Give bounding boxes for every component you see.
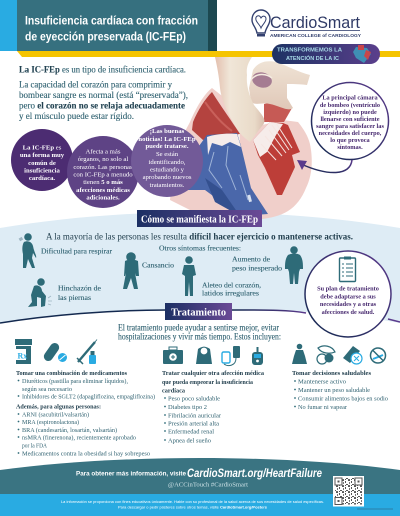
circle: IC-FEp muy común: cardíaca. xyxy=(29,175,55,182)
symptoms lead text: A la mayoría de las personas les resulta difícil hacer ejercicio o mantenerse activas. xyxy=(46,232,353,242)
intro text: pero el corazón no se relaja adecuadamente xyxy=(19,100,185,110)
icon: tired person xyxy=(123,252,139,289)
callout: plan de tratamiento: Su plan de tratamiento xyxy=(317,286,379,292)
pill: Transformemos la atención: ATENCIÓN DE LA IC xyxy=(286,54,339,62)
symptom labels: Dificultad para respirar xyxy=(41,246,112,256)
circle: IC-FEp muy común: La IC-FEp es xyxy=(23,144,62,152)
treatment intro: hospitalizaciones y vivir más tiempo. Estos incluyen: xyxy=(118,332,281,342)
column: otras afecciones: Tratar cualquier otra afección médica xyxy=(162,370,265,377)
heart illustration xyxy=(170,57,312,219)
callout: plan de tratamiento xyxy=(232,251,400,337)
column: otras afecciones: Enfermedad renal xyxy=(168,428,214,435)
column: otras afecciones: Peso poco saludable xyxy=(168,395,220,402)
symptom labels: latidos irregulares xyxy=(202,288,259,298)
footer call to action: Para obtener más información, visite xyxy=(76,470,186,478)
intro text: La IC-FEp es un tipo de insuficiencia cardíaca. xyxy=(19,64,186,74)
heading: Tratamiento xyxy=(165,303,232,320)
circle: afecciones adicionales xyxy=(67,136,139,208)
callout: cámara de bombeo: de bombeo (ventrículo xyxy=(320,102,380,109)
column: medicamentos: nsMRA (finerenona), recientemente aprobado xyxy=(22,434,136,441)
callout: cámara de bombeo: síntomas. xyxy=(337,144,363,151)
column: medicamentos: Además, para algunas personas: xyxy=(16,403,101,410)
circle: IC-FEp muy común: una forma muy xyxy=(20,152,65,159)
heading: Cómo se manifiesta: Cómo se manifiesta la IC-FEp xyxy=(141,214,258,226)
symptom labels xyxy=(41,244,282,302)
footer disclaimer: La información se proporciona con fines educativos únicamente. Hable con su profesional de la salud acerca de sus necesidades de salud específicas. xyxy=(61,500,324,504)
circle: buenas noticias: identificando, xyxy=(149,159,186,166)
column: medicamentos: Inhibidores de SGLT2 (dapagliflozina, empagliflozina) xyxy=(22,393,155,400)
callout: plan de tratamiento: afecciones de salud. xyxy=(322,309,375,316)
symptom labels: Aumento de xyxy=(232,254,271,264)
column: decisiones saludables: Mantener un peso saludable xyxy=(298,387,370,394)
icon: medical case xyxy=(163,347,183,364)
CardioSmart logo: CardioSmart xyxy=(270,13,360,32)
treatment intro: El tratamiento puede ayudar a sentirse mejor, evitar xyxy=(118,322,279,332)
circle: IC-FEp muy común xyxy=(11,129,73,191)
circle: afecciones adicionales: afecciones médicas xyxy=(76,187,130,194)
column: medicamentos: ARNI (sacubitril/valsartán) xyxy=(22,411,89,418)
icon: person with swollen legs xyxy=(28,278,52,307)
callout: cámara de bombeo: izquierdo) no puede xyxy=(323,109,377,116)
footer disclaimer xyxy=(61,500,324,510)
poster code line xyxy=(357,508,393,510)
icon: pill bottle xyxy=(15,339,32,364)
title xyxy=(25,16,198,44)
column: otras afecciones: cardíaca xyxy=(162,387,186,394)
circle: afecciones adicionales: con IC-FEp a menudo xyxy=(73,172,133,178)
symptom labels: Cansancio xyxy=(142,260,174,270)
intro text: bombear sangre es normal (está “preservada”), xyxy=(19,90,188,100)
column: otras afecciones: que pueda empeorar la insuficiencia xyxy=(162,379,254,386)
intro text: La capacidad del corazón para comprimir y xyxy=(19,80,172,90)
circle: afecciones adicionales: adicionales. xyxy=(86,194,120,202)
pill: Transformemos la atención: TRANSFORMEMOS LA xyxy=(277,48,342,54)
symptom labels: peso inesperado xyxy=(232,264,282,272)
column: medicamentos: Diuréticos (pastilla para eliminar líquidos), xyxy=(22,378,128,385)
icon: meditation xyxy=(292,344,307,364)
icon: syringe and vial xyxy=(77,340,97,364)
light blue symptoms band xyxy=(0,212,400,323)
icon: no salt xyxy=(343,346,362,364)
callout: cámara de bombeo: lo que provoca xyxy=(330,137,371,144)
footer call to action: CardioSmart.org/HeartFailure xyxy=(187,468,323,480)
column: medicamentos: Medicamentos contra la obesidad si hay sobrepeso xyxy=(22,450,150,457)
icon: person with weight gain xyxy=(285,246,303,284)
column: medicamentos: por la FDA xyxy=(22,442,47,449)
icon: bathroom scale xyxy=(196,347,212,364)
callout: cámara de bombeo xyxy=(297,82,388,173)
circle: buenas noticias: noticias! La IC-FEp xyxy=(138,136,196,143)
icon: healthy food xyxy=(317,346,335,364)
icon: glucometer xyxy=(252,347,263,365)
column: otras afecciones: Diabetes tipo 2 xyxy=(168,404,207,411)
icon: pill bottle: Rx xyxy=(18,352,27,360)
circle: buenas noticias: puede tratarse. xyxy=(145,143,189,150)
callout: cámara de bombeo: necesidades del cuerpo, xyxy=(319,130,382,137)
circle: afecciones adicionales: órganos, no solo al xyxy=(78,156,128,163)
callout: plan de tratamiento: debe adaptarse a sus xyxy=(320,294,376,300)
QR code xyxy=(333,476,364,506)
callout: cámara de bombeo: sangre para satisfacer las xyxy=(316,123,384,130)
circle: IC-FEp muy común: común de xyxy=(28,160,56,167)
heading: Tratamiento: Tratamiento xyxy=(171,308,226,318)
callout: cámara de bombeo: llenarse con suficiente xyxy=(320,116,380,123)
title: Insuficiencia cardíaca con fracción xyxy=(25,16,198,28)
footer call to action: @ACCinTouch #CardioSmart xyxy=(168,482,248,488)
circle: buenas noticias: estudiando y xyxy=(150,166,185,174)
column: medicamentos: MRA (espironolactona) xyxy=(22,419,79,426)
circle: buenas noticias: tratamientos. xyxy=(150,182,185,189)
column: otras afecciones: Apnea del sueño xyxy=(168,437,211,444)
intro text xyxy=(19,64,188,121)
circle: buenas noticias xyxy=(131,125,203,197)
column: medicamentos xyxy=(16,370,155,457)
icon: blood pressure monitor xyxy=(222,346,240,366)
column: medicamentos: según sea necesario xyxy=(22,386,72,393)
circle: afecciones adicionales: tienen 5 o más xyxy=(83,179,123,186)
treatment intro xyxy=(118,322,281,342)
callout: cámara de bombeo: La principal cámara xyxy=(322,94,378,102)
symptom labels: Hinchazón de xyxy=(58,284,102,292)
navy divider xyxy=(0,310,166,323)
CardioSmart logo: AMERICAN COLLEGE of CARDIOLOGY xyxy=(270,33,361,38)
icon: no smoking xyxy=(370,348,386,363)
symptom labels: Otros síntomas frecuentes: xyxy=(159,244,241,252)
symptom labels: Aleteo del corazón, xyxy=(202,280,261,290)
circle: afecciones adicionales: corazón. Las personas xyxy=(73,164,133,171)
column: otras afecciones: Fibrilación auricular xyxy=(168,412,222,419)
heading: Cómo se manifiesta xyxy=(137,210,262,227)
column: decisiones saludables: Tomar decisiones saludables xyxy=(292,370,371,377)
column: medicamentos: BRA (candesartán, losartán, valsartán) xyxy=(22,427,117,434)
column: decisiones saludables: Consumir alimentos bajos en sodio xyxy=(298,395,388,402)
footer call to action xyxy=(76,468,323,488)
column: otras afecciones xyxy=(162,370,265,444)
callout: plan de tratamiento: necesidades y a otras xyxy=(320,301,377,308)
column: decisiones saludables: No fumar ni vapear xyxy=(298,404,348,411)
icon: capsule and tablet xyxy=(42,341,67,363)
intro text: y el músculo puede estar rígido. xyxy=(19,111,134,121)
symptom labels: las piernas xyxy=(58,293,91,302)
circle: buenas noticias: ¡Las buenas xyxy=(150,128,185,135)
title: de eyección preservada (IC-FEp) xyxy=(25,32,186,44)
CardioSmart logo xyxy=(252,10,361,38)
column: otras afecciones: Presión arterial alta xyxy=(168,420,219,427)
circle: buenas noticias: aprobando nuevos xyxy=(143,174,192,181)
circle: afecciones adicionales: Afecta a más xyxy=(86,148,121,156)
footer band xyxy=(0,458,400,516)
circle: buenas noticias: Se están xyxy=(156,151,179,158)
column: decisiones saludables: Mantenerse activo xyxy=(298,378,346,385)
icon: person short of breath xyxy=(19,233,36,268)
column: medicamentos: Tomar una combinación de medicamentos xyxy=(16,370,127,377)
icon: person with palpitations xyxy=(182,256,196,296)
footer disclaimer: Para descargar o pedir pósteres sobre otros temas, visite CardioSmart.org/Posters xyxy=(118,506,267,510)
column: decisiones saludables xyxy=(292,370,388,411)
header band xyxy=(0,0,400,57)
pill: Transformemos la atención xyxy=(272,44,380,64)
circle: IC-FEp muy común: insuficiencia xyxy=(24,168,60,174)
